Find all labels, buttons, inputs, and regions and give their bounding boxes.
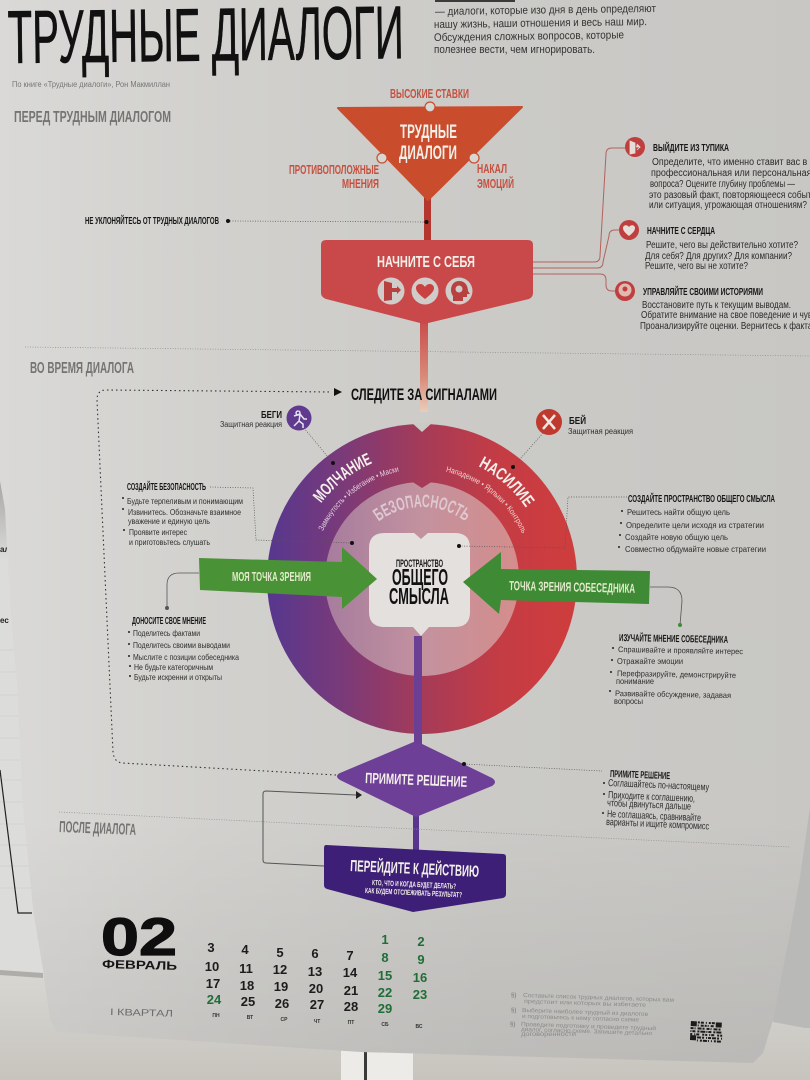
calendar grid: СР: [281, 1017, 288, 1023]
list: make a decision: Соглашайтесь по-настоящему: [608, 778, 709, 793]
center box: shared meaning: ОБЩЕГО: [392, 564, 448, 590]
icon: door exit: [378, 278, 404, 304]
intro text: полезнее вести, чем игнорировать.: [434, 44, 595, 56]
intro text: нашу жизнь, наши отношения и весь наш мир.: [434, 16, 647, 31]
tip: start with heart: [619, 220, 798, 272]
list: create safety: Будьте терпеливым и понимающим: [127, 497, 243, 506]
calendar grid: СБ: [381, 1022, 389, 1028]
center box: shared meaning: СМЫСЛА: [389, 583, 449, 609]
calendar grid: 12: [273, 962, 287, 977]
icon: head with gear: [446, 278, 472, 304]
ring sublabel: silence: Замкнутость • Избегание • Маски: [318, 467, 399, 530]
tip: get out of the deadlock: [625, 137, 810, 211]
calendar grid: 21: [344, 983, 358, 998]
green arrow: my point of view: [199, 547, 377, 609]
callout: do not avoid: [85, 214, 428, 227]
footnotes: Проведите подготовку и проведите трудный: [521, 1021, 656, 1032]
calendar month: [101, 908, 178, 973]
flight reaction: Защитная реакция: [220, 420, 282, 429]
list: explore other opinion: понимание: [616, 677, 655, 686]
funnel labels: [289, 86, 514, 191]
list: explore other opinion: вопросы: [614, 697, 643, 706]
ring label: silence: МОЛЧАНИЕ: [312, 452, 372, 503]
list: make a decision: Не соглашаясь, сравнивайте: [607, 809, 702, 824]
funnel labels: НАКАЛ: [477, 161, 507, 176]
list: create shared meaning: Определите цели исходя из стратегии: [626, 521, 764, 530]
list: convey your opinion: [128, 573, 239, 682]
calendar grid: 29: [378, 1001, 392, 1016]
list: create shared meaning: Совместно обдумайте новые стратегии: [625, 545, 766, 554]
calendar grid: 26: [275, 996, 289, 1011]
calendar grid: 19: [274, 979, 288, 994]
calendar grid: ПН: [212, 1013, 220, 1019]
intro text: Обсуждения сложных вопросов, которые: [434, 29, 624, 44]
funnel: difficult dialogues: ДИАЛОГИ: [399, 143, 457, 164]
calendar grid: 9: [417, 952, 425, 967]
footnotes: договоренности: [521, 1032, 576, 1038]
tip: manage your stories: [615, 281, 810, 332]
calendar month: 02: [101, 908, 177, 967]
callout: do not avoid: НЕ УКЛОНЯЙТЕСЬ ОТ ТРУДНЫХ ДИАЛОГОВ: [85, 214, 219, 227]
calendar grid: 22: [378, 985, 392, 1000]
flight reaction: БЕГИ: [261, 410, 282, 421]
dashed feedback loop: [97, 390, 336, 775]
list: convey your opinion: Будьте искренни и открыты: [134, 673, 222, 682]
list: create safety: уважение и единую цель: [128, 517, 210, 526]
icon: heart: [412, 278, 438, 304]
fight reaction: [511, 409, 633, 469]
tip: start with heart: Решите, чего вы не хотите?: [645, 261, 748, 272]
green arrow: other point of view: ТОЧКА ЗРЕНИЯ СОБЕСЕДНИКА: [509, 578, 636, 596]
calendar grid: 23: [413, 987, 427, 1002]
box: take action: [324, 845, 506, 912]
list: convey your opinion: Поделитесь фактами: [133, 629, 200, 638]
center box: shared meaning: [369, 532, 470, 636]
list: make a decision: варианты и ищите компромисс: [606, 817, 709, 832]
footnotes: §): [511, 993, 516, 999]
calendar grid: ПТ: [348, 1020, 354, 1026]
fight reaction: Защитная реакция: [568, 427, 633, 436]
tip: start with heart: НАЧНИТЕ С СЕРДЦА: [647, 226, 715, 237]
calendar grid: 27: [310, 997, 324, 1012]
calendar grid: 1: [381, 932, 389, 947]
list: convey your opinion: Мыслите с позиции собеседника: [133, 653, 239, 662]
box: take action: КТО, ЧТО И КОГДА БУДЕТ ДЕЛАТЬ?: [372, 878, 456, 891]
calendar grid: 20: [309, 981, 323, 996]
quarter label: I КВАРТАЛ: [110, 1007, 173, 1020]
green arrow: other point of view: [463, 552, 650, 614]
calendar grid: 17: [206, 976, 220, 991]
calendar grid: 24: [207, 992, 222, 1007]
ring sublabel: violence: Нападение • Ярлыки • Контроль: [446, 466, 525, 534]
calendar grid: ВТ: [247, 1015, 253, 1021]
source note: По книге «Трудные диалоги», Рон Макмиллан: [12, 80, 170, 89]
diamond: make a decision: ПРИМИТЕ РЕШЕНИЕ: [365, 770, 467, 791]
funnel labels: ПРОТИВОПОЛОЖНЫЕ: [289, 162, 379, 177]
footnotes: предстоит или которых вы избегаете: [524, 999, 647, 1009]
list: convey your opinion: ДОНОСИТЕ СВОЕ МНЕНИЕ: [132, 616, 206, 627]
footnotes: Составьте список трудных диалогов, которых вам: [523, 993, 674, 1004]
calendar grid: 3: [207, 940, 215, 955]
connector lines to tips: [533, 148, 626, 291]
section heading: during: ВО ВРЕМЯ ДИАЛОГА: [30, 360, 134, 377]
intro text: [434, 0, 656, 56]
tip: get out of the deadlock: ВЫЙДИТЕ ИЗ ТУПИКА: [653, 141, 729, 154]
calendar grid: ЧТ: [314, 1019, 320, 1025]
list: create safety: [122, 480, 354, 547]
box: take action: КАК БУДЕМ ОТСЛЕЖИВАТЬ РЕЗУЛЬТАТ?: [365, 886, 462, 899]
arrow head: [334, 388, 342, 396]
calendar grid: 13: [308, 964, 322, 979]
loop arrow: [263, 791, 362, 866]
calendar grid: 11: [239, 961, 253, 976]
list: explore other opinion: ИЗУЧАЙТЕ МНЕНИЕ СОБЕСЕДНИКА: [619, 631, 728, 646]
intro text: — диалоги, которые изо дня в день определяют: [435, 3, 656, 18]
footnotes: §): [510, 1022, 515, 1028]
calendar grid: 5: [276, 945, 284, 960]
fight reaction: БЕЙ: [569, 414, 586, 427]
list: convey your opinion: Не будьте категоричным: [134, 663, 213, 672]
funnel: difficult dialogues: [338, 102, 522, 243]
list: explore other opinion: Развивайте обсуждение, задавая: [615, 689, 731, 700]
calendar grid: 7: [346, 948, 354, 963]
list: create safety: Проявите интерес: [129, 528, 187, 537]
flight reaction: [220, 406, 335, 465]
ring label: safety: БЕЗОПАСНОСТЬ: [372, 494, 468, 521]
list: explore other opinion: Перефразируйте, демонстрируйте: [617, 669, 737, 680]
list: make a decision: Приходите к соглашению,: [608, 790, 695, 805]
calendar grid: 28: [344, 999, 358, 1014]
list: create shared meaning: [457, 492, 775, 554]
list: convey your opinion: Поделитесь своими выводами: [133, 641, 230, 650]
QR code: [690, 1021, 723, 1042]
footnotes: диалог, согласно схеме. Запишите детально: [521, 1027, 653, 1037]
calendar grid: 4: [241, 942, 249, 957]
footnotes: и подготовьтесь к нему согласно схеме: [522, 1014, 640, 1024]
stem to signals: [420, 322, 428, 412]
box: start with yourself: [321, 240, 533, 324]
list: make a decision: чтобы двинуться дальше: [607, 797, 692, 813]
concentric circle diagram: [268, 424, 577, 734]
funnel labels: МНЕНИЯ: [342, 176, 379, 191]
calendar grid: 15: [378, 968, 392, 983]
box: start with yourself: НАЧНИТЕ С СЕБЯ: [377, 254, 475, 271]
calendar grid: 14: [343, 965, 358, 980]
diamond: make a decision: [337, 741, 495, 852]
calendar grid: 16: [413, 970, 427, 985]
list: create safety: Извинитесь. Обозначьте взаимное: [128, 508, 241, 517]
calendar grid: 10: [205, 959, 219, 974]
list: create safety: СОЗДАЙТЕ БЕЗОПАСНОСТЬ: [127, 480, 206, 493]
purple stem: [414, 636, 422, 744]
center box: shared meaning: ПРОСТРАНСТВО: [396, 558, 443, 570]
footnotes: [510, 993, 674, 1038]
list: make a decision: [462, 762, 709, 832]
footnotes: §): [511, 1008, 516, 1014]
footnotes: Выберите наиболее трудный из диалогов: [522, 1007, 648, 1018]
list: explore other opinion: [609, 587, 743, 706]
list: explore other opinion: Отражайте эмоции: [617, 657, 683, 666]
calendar grid: 8: [381, 950, 389, 965]
calendar grid: 2: [417, 934, 425, 949]
list: explore other opinion: Спрашивайте и проявляйте интерес: [618, 645, 743, 656]
list: make a decision: ПРИМИТЕ РЕШЕНИЕ: [610, 769, 670, 782]
background wall and neighbouring sheets: ал: [0, 545, 10, 554]
green arrow: my point of view: МОЯ ТОЧКА ЗРЕНИЯ: [232, 569, 311, 584]
calendar month: ФЕВРАЛЬ: [102, 957, 178, 973]
list: create shared meaning: Создайте новую общую цель: [625, 533, 728, 542]
background wall and neighbouring sheets: ес: [0, 616, 9, 625]
calendar grid: [205, 932, 427, 1030]
box: take action: ПЕРЕЙДИТЕ К ДЕЙСТВИЮ: [350, 856, 480, 881]
calendar grid: ВС: [415, 1024, 423, 1030]
list: create safety: и приготовьтесь слушать: [129, 538, 210, 547]
funnel: difficult dialogues: ТРУДНЫЕ: [400, 122, 457, 143]
list: create shared meaning: Решитесь найти общую цель: [627, 508, 730, 517]
heading: watch the signals: СЛЕДИТЕ ЗА СИГНАЛАМИ: [351, 386, 497, 404]
calendar grid: 25: [241, 994, 255, 1009]
section heading: after: ПОСЛЕ ДИАЛОГА: [59, 819, 137, 839]
funnel labels: ВЫСОКИЕ СТАВКИ: [390, 86, 469, 101]
calendar grid: 6: [311, 946, 319, 961]
ring label: violence: НАСИЛИЕ: [479, 456, 535, 508]
calendar grid: 18: [240, 978, 254, 993]
funnel labels: ЭМОЦИЙ: [477, 176, 514, 191]
section heading: before: ПЕРЕД ТРУДНЫМ ДИАЛОГОМ: [14, 109, 171, 126]
